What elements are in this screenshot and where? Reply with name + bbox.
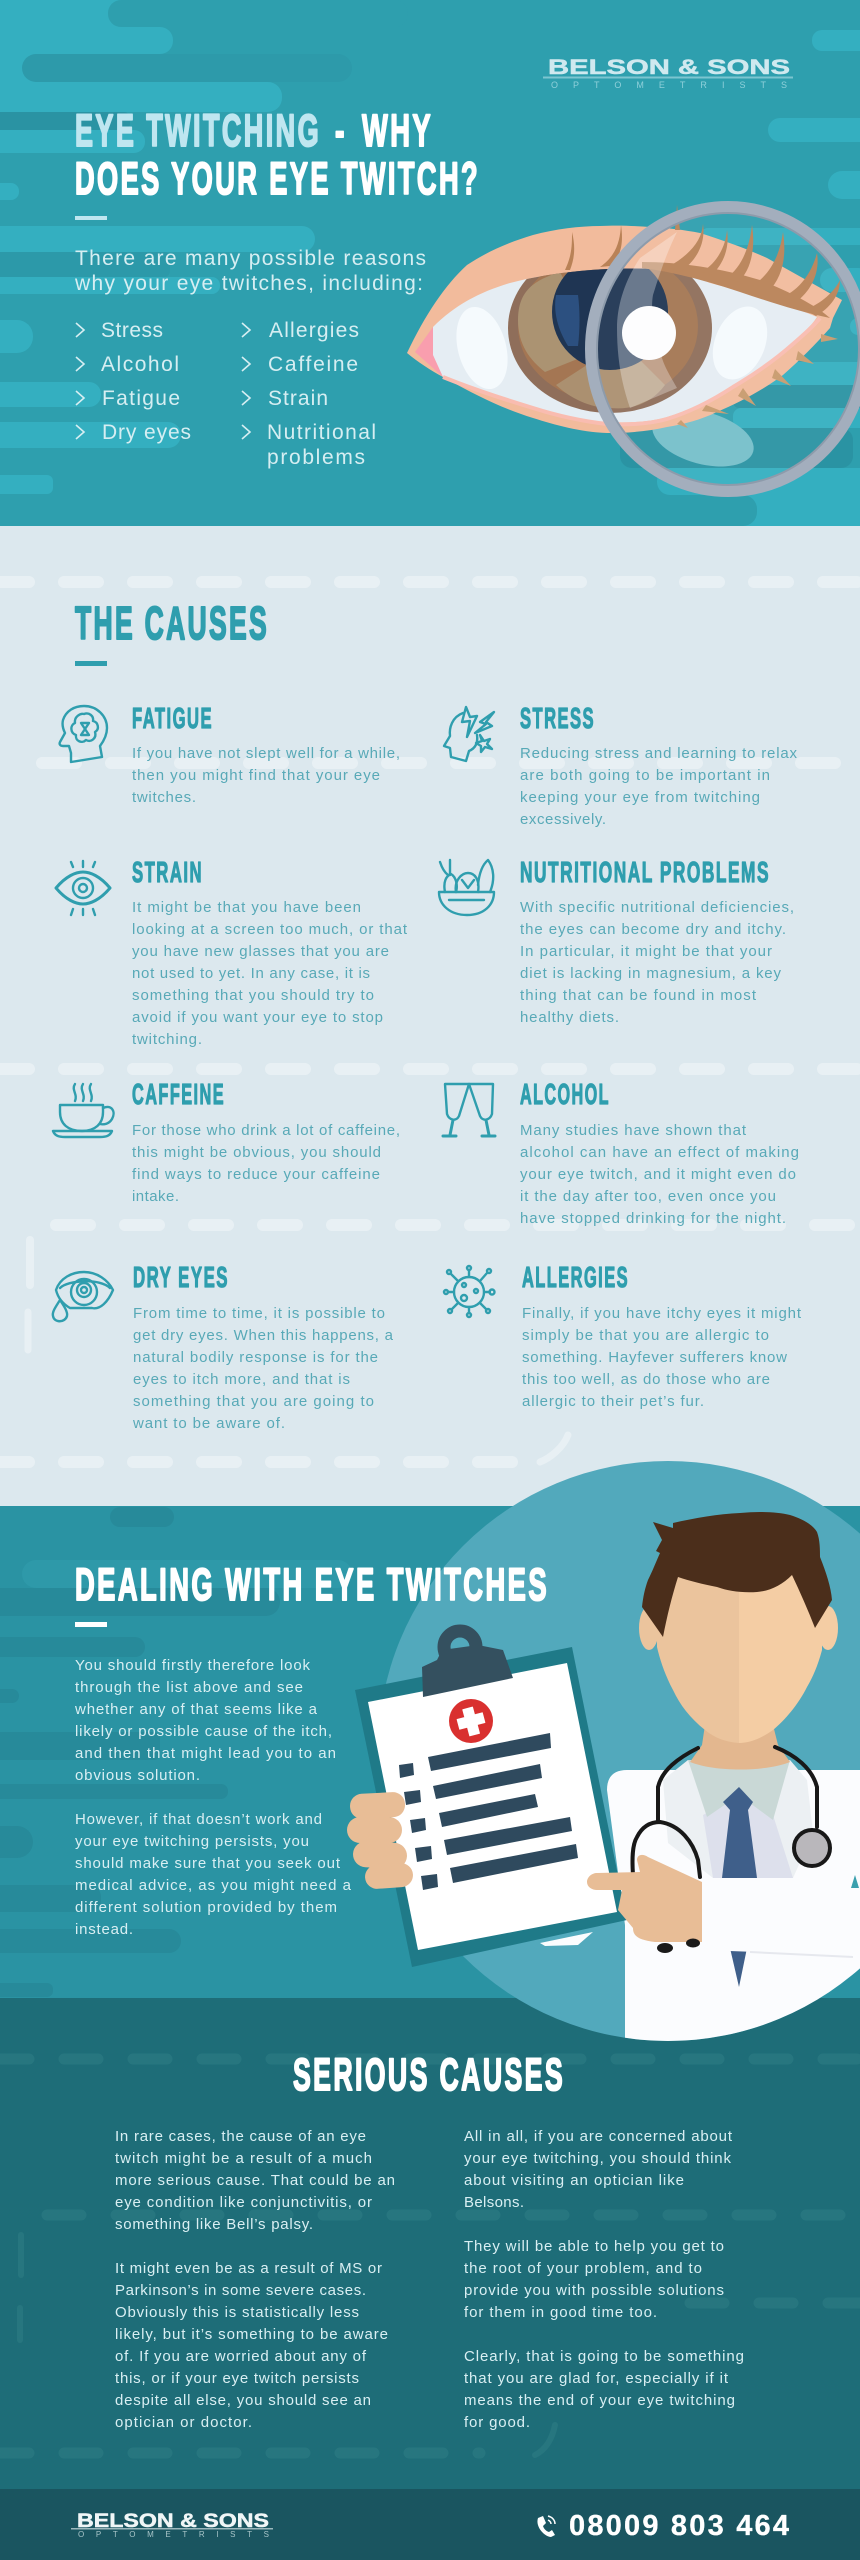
item: dry eyes: natural bodily response is for the [133,1349,378,1366]
item: dry eyes: From time to time, it is possible to [133,1305,385,1322]
checklist bars [399,1733,578,1890]
item: nutritional problems: the eyes can become dry and itchy. [520,921,786,938]
icon: champagne glasses [443,1084,495,1136]
text column: right: your eye twitching, you should think [464,2150,732,2167]
item: dry eyes: eyes to itch more, and that is [133,1371,350,1388]
item: caffeine: For those who drink a lot of caffeine, [132,1122,400,1139]
item: alcohol: ALCOHOL [520,1079,610,1111]
list of reasons: Nutritional [267,421,376,444]
stethoscope [632,1747,830,1877]
list of reasons: Allergies [269,319,359,342]
item: alcohol: it the day after too, even once you [520,1188,776,1205]
item: nutritional problems: With specific nutritional deficiencies, [520,899,794,916]
item: allergies: something. Hayfever sufferers know [522,1349,787,1366]
text column: right: for them in good time too. [464,2304,657,2321]
icon: food bowl [439,860,494,915]
item: allergies: ALLERGIES [522,1262,629,1294]
item: fatigue: twitches. [132,789,196,806]
text column: right: means the end of your eye twitching [464,2392,735,2409]
text column: left: more serious cause. That could be an [115,2172,395,2189]
item: dry eyes: DRY EYES [133,1262,229,1294]
icon: eye with tear [53,1272,113,1321]
text column: left: It might even be as a result of MS or [115,2260,382,2277]
icon: virus [444,1266,494,1317]
list of reasons: problems [267,446,365,469]
logo: Belson & Sons: OPTOMETRISTS [551,80,787,90]
doctor head [639,1512,838,1770]
item: strain: looking at a screen too much, or that [132,921,408,938]
item: strain: STRAIN [132,857,203,889]
intro text: There are many possible reasons [75,247,426,270]
lower lashes [677,334,838,428]
title [76,113,477,196]
item: stress: keeping your eye from twitching [520,789,760,806]
item: fatigue: FATIGUE [132,703,213,735]
item: stress [444,703,798,828]
panel: hero [0,0,860,526]
text column: right: about visiting an optician like [464,2172,684,2189]
text column: right: the root of your problem, and to [464,2260,702,2277]
item: allergies: simply be that you are allergic to [522,1327,769,1344]
icon: head with lightning [444,707,494,761]
item: caffeine: find ways to reduce your caffeine [132,1166,380,1183]
item: strain: not used to yet. In any case, it is [132,965,370,982]
item: strain [56,857,408,1048]
text block: dealing advice: your eye twitching persists, you [75,1833,309,1850]
panel: footer [0,2489,860,2560]
text column: left: this, or if your eye twitch persists [115,2370,359,2387]
text column: right: Belsons. [464,2194,524,2211]
text column: right: They will be able to help you get to [464,2238,724,2255]
left hand fingers [347,1792,414,1890]
text block: dealing advice: obvious solution. [75,1767,200,1784]
lens [591,207,860,491]
text block: dealing advice: different solution provided by them [75,1899,337,1916]
text block: dealing advice: should make sure that you seek out [75,1855,341,1872]
item: allergies [444,1262,802,1410]
logo: Belson & Sons: BELSON & SONS [548,56,790,79]
logo: Belson & Sons [543,59,793,88]
text column: right: All in all, if you are concerned about [464,2128,733,2145]
heading: dealing with eye twitches: DEALING WITH EYE TWITCHES [75,1559,549,1610]
text block: dealing advice: You should firstly therefore look [75,1657,310,1674]
item: fatigue [60,703,400,806]
text column: left: optician or doctor. [115,2414,252,2431]
text column: left: twitch might be a result of a much [115,2150,372,2167]
item: nutritional problems: In particular, it might be that your [520,943,772,960]
icon: coffee cup [53,1084,114,1137]
item: fatigue: then you might find that your eye [132,767,380,784]
text column: right: Clearly, that is going to be something [464,2348,744,2365]
item: stress: STRESS [520,703,595,735]
item: dry eyes: get dry eyes. When this happens, a [133,1327,394,1344]
item: nutritional problems: thing that can be found in most [520,987,757,1004]
text block: dealing advice: medical advice, as you might need a [75,1877,352,1894]
illustration: doctor with clipboard [347,1461,860,2045]
text column: left: likely, but it’s something to be aware [115,2326,388,2343]
item: stress: excessively. [520,811,606,828]
text block: dealing advice: instead. [75,1921,133,1938]
medical cross [449,1699,493,1743]
clipboard [355,1631,627,1967]
item: dry eyes: want to be aware of. [132,1415,285,1432]
text block: dealing advice: through the list above and see [75,1679,303,1696]
item: caffeine: this might be obvious, you should [132,1144,381,1161]
title: EYE TWITCHING [75,105,321,156]
pointing hand [587,1855,702,1953]
title: - [335,105,347,156]
list of reasons: Stress [101,319,163,342]
text column: left [115,2128,395,2431]
item: alcohol: your eye twitch, and it might even do [520,1166,796,1183]
item: alcohol: Many studies have shown that [520,1122,747,1139]
heading: serious causes: SERIOUS CAUSES [293,2049,565,2100]
text column: right: for good. [464,2414,530,2431]
item: dry eyes [53,1262,394,1432]
text column: left: eye condition like conjunctivitis, or [115,2194,372,2211]
panel: the causes [0,526,860,1506]
text column: right: that you are glad for, especially if it [464,2370,729,2387]
upper lash band and lashes [565,205,840,318]
item: strain: twitching. [132,1031,202,1048]
list of reasons: Fatigue [102,387,180,410]
panel: serious causes [0,1998,860,2489]
list of reasons: Alcohol [101,353,179,376]
list of reasons: Dry eyes [102,421,191,444]
item: caffeine: CAFFEINE [132,1079,225,1111]
icon: head with hourglass [60,706,107,762]
item: nutritional problems [439,857,794,1026]
text block: dealing advice: likely or possible cause of the itch, [75,1723,332,1740]
text block: dealing advice [74,1657,352,1938]
doctor coat [607,1760,860,2045]
clipboard clip [422,1631,513,1697]
item: nutritional problems: diet is lacking in magnesium, a key [520,965,782,982]
item: strain: you have new glasses that you are [132,943,389,960]
item: alcohol: have stopped drinking for the night. [520,1210,786,1227]
item: fatigue: If you have not slept well for a while, [132,745,400,762]
text column: left: Parkinson’s in some severe cases. [115,2282,366,2299]
item: alcohol [443,1079,799,1227]
item: strain: avoid if you want your eye to stop [132,1009,383,1026]
text column: left: despite all else, you should see an [115,2392,371,2409]
list of reasons: Caffeine [268,353,358,376]
text block: dealing advice: However, if that doesn’t work and [75,1811,322,1828]
intro text: why your eye twitches, including: [74,272,423,295]
text block: dealing advice: and then that might lead you to an [75,1745,336,1762]
item: caffeine [53,1079,400,1205]
text column: right [464,2128,744,2431]
text block: dealing advice: whether any of that seems like a [74,1701,318,1718]
logo: footer: BELSON & SONS [77,2511,269,2532]
text column: left: Obviously this is statistically less [115,2304,359,2321]
panel: dealing with eye twitches [0,1461,860,2045]
logo: footer [71,2511,273,2539]
item: stress: Reducing stress and learning to relax [520,745,798,762]
item: strain: It might be that you have been [132,899,361,916]
text column: right: provide you with possible solutions [464,2282,724,2299]
item: stress: are both going to be important in [520,767,770,784]
title: WHY [362,105,433,156]
item: allergies: Finally, if you have itchy eyes it might [522,1305,802,1322]
item: allergies: this too well, as do those who are [522,1371,770,1388]
item: strain: something that you should try to [132,987,374,1004]
intro text [74,247,426,295]
item: dry eyes: something that you are going to [133,1393,374,1410]
heading: the causes: THE CAUSES [75,597,269,649]
list of reasons [76,319,376,469]
title: DOES YOUR EYE TWITCH? [75,153,480,204]
icon: eye with rays [56,861,110,915]
icon: phone [537,2516,555,2537]
item: caffeine: intake. [132,1188,179,1205]
illustration: eye with lens [407,205,860,491]
logo: footer: OPTOMETRISTS [78,2530,269,2539]
text column: left: of. If you are worried about any of [115,2348,367,2365]
list of reasons: Strain [268,387,328,410]
item: nutritional problems: healthy diets. [520,1009,619,1026]
item: alcohol: alcohol can have an effect of making [520,1144,799,1161]
item: allergies: allergic to their pet’s fur. [522,1393,704,1410]
text column: left: something like Bell’s palsy. [115,2216,313,2233]
phone number: 08009 803 464 [569,2510,789,2542]
text column: left: In rare cases, the cause of an eye [115,2128,366,2145]
